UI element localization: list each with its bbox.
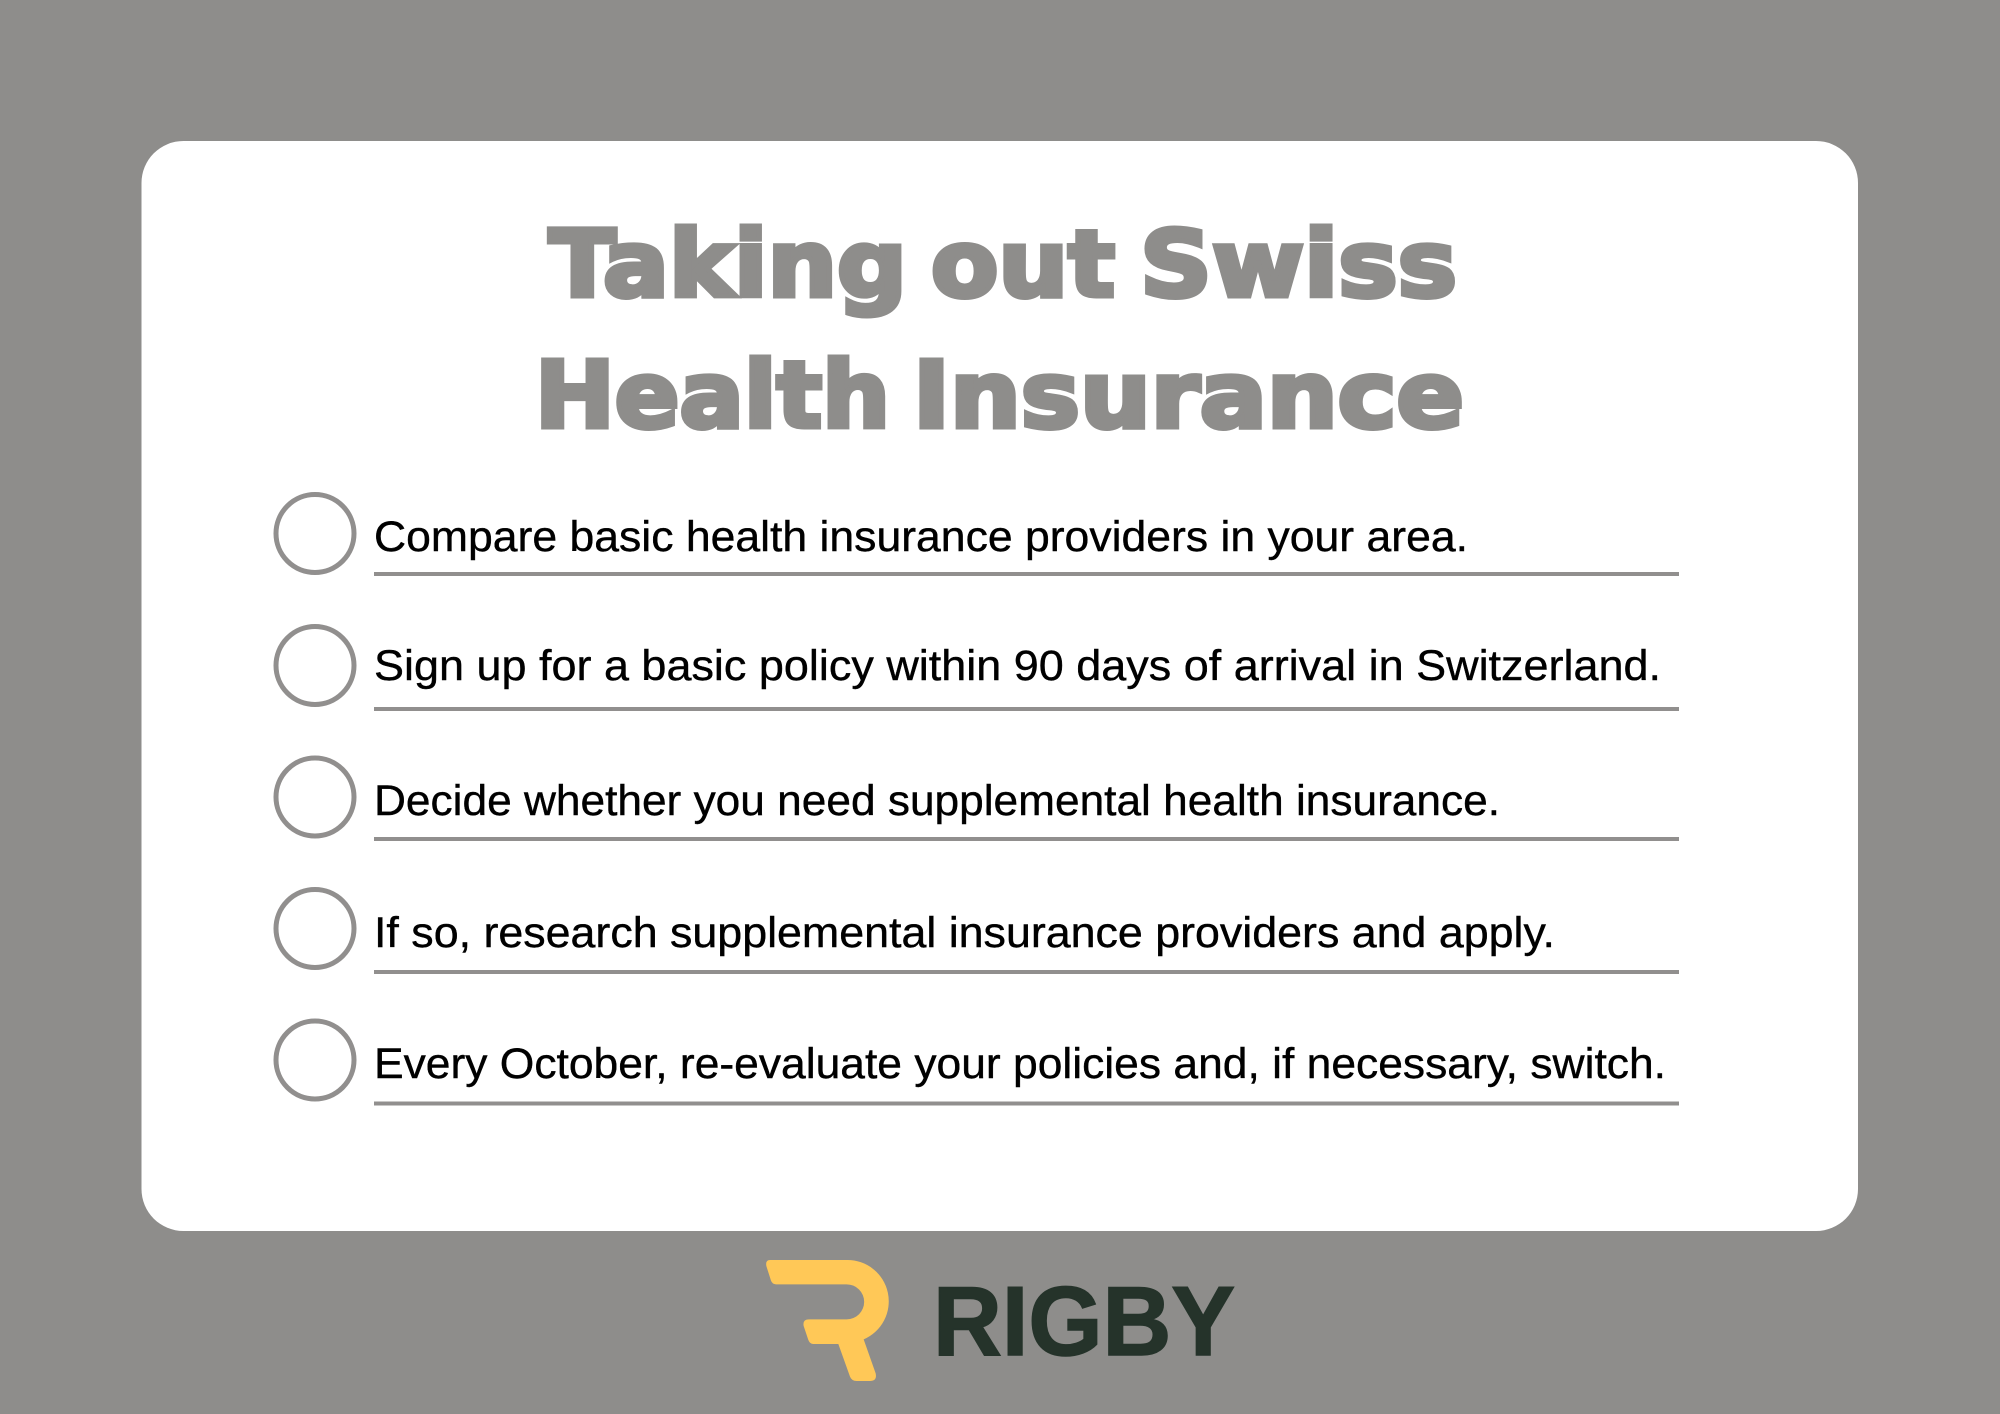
- icon: yellow R mark: [766, 1260, 889, 1381]
- checklist item 1: [276, 494, 1679, 574]
- title: Insurance: [913, 342, 1464, 449]
- checklist item 1: Compare basic health insurance providers in your area.: [374, 513, 1468, 561]
- checklist item 2: Sign up for a basic policy within 90 days of arrival in Switzerland.: [374, 642, 1661, 690]
- checklist item 4: [276, 890, 1679, 972]
- title: Health: [535, 342, 890, 449]
- checklist item 5: Every October, re-evaluate your policies and, if necessary, switch.: [374, 1040, 1666, 1088]
- checklist item 2: [276, 626, 1679, 709]
- checklist item 5: [276, 1021, 1679, 1104]
- checklist item 3: [276, 758, 1679, 839]
- panel: white checklist card: [142, 141, 1858, 1231]
- title: [535, 211, 1464, 449]
- logo: Rigby: [766, 1260, 1235, 1381]
- checklist item 4: If so, research supplemental insurance providers and apply.: [374, 909, 1555, 957]
- title: Taking: [549, 211, 907, 318]
- title: Swiss: [1140, 211, 1457, 318]
- logo wordmark: RIGBY: [933, 1266, 1235, 1376]
- checklist item 3: Decide whether you need supplemental health insurance.: [374, 777, 1500, 825]
- title: out: [931, 211, 1115, 318]
